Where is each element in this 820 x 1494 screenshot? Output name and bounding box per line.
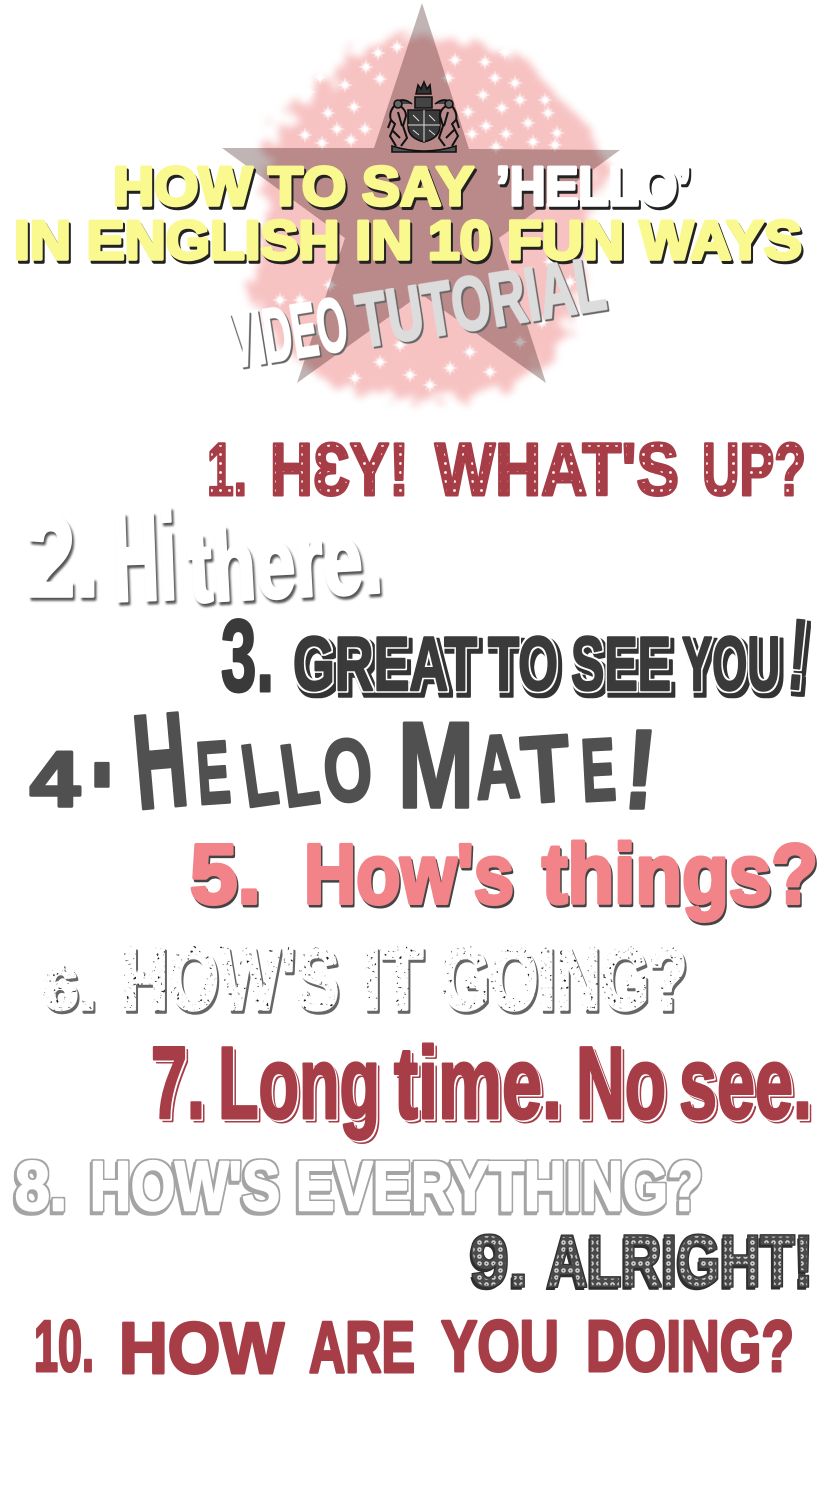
item 8: 8. bbox=[15, 1147, 67, 1225]
item 2: there. bbox=[185, 502, 385, 624]
item 8: EVERYTHING? bbox=[296, 1147, 703, 1225]
panel: header star emblem bbox=[222, 3, 620, 400]
item 6 bbox=[42, 929, 687, 1028]
item 4: H bbox=[128, 685, 193, 838]
icon: royal coat of arms bbox=[388, 82, 459, 152]
item 4: E bbox=[193, 722, 233, 823]
subtitle: video tutorial: VIDEO bbox=[221, 282, 353, 385]
item 4: T bbox=[518, 715, 573, 823]
item 7: No bbox=[576, 1026, 666, 1140]
item 10 bbox=[34, 1307, 794, 1389]
item 2: 2. bbox=[27, 495, 99, 620]
item 1 bbox=[207, 428, 806, 511]
item 3 bbox=[221, 598, 812, 713]
item 7: 7. bbox=[151, 1026, 205, 1140]
title line 1: ’HELLO’ bbox=[496, 155, 691, 217]
item 1: 1. bbox=[207, 428, 247, 511]
subtitle: video tutorial: TUTORIAL bbox=[351, 241, 611, 364]
item 5: How's bbox=[304, 827, 514, 921]
item 4: E bbox=[579, 719, 618, 820]
item 7: Long bbox=[218, 1026, 380, 1140]
item 5: 5. bbox=[190, 827, 261, 921]
item 10: YOU bbox=[441, 1307, 559, 1387]
item 3: GREAT bbox=[293, 622, 477, 707]
item 6: GOING? bbox=[441, 929, 687, 1028]
item 10: 10. bbox=[34, 1307, 94, 1387]
item 10: HOW bbox=[119, 1309, 284, 1389]
item 7 bbox=[151, 1026, 812, 1140]
item 6: HOW'S bbox=[121, 929, 339, 1028]
item 4: A bbox=[473, 717, 522, 819]
item 1: WHAT'S bbox=[435, 428, 679, 511]
item 9: 9. bbox=[470, 1222, 528, 1302]
item 3: 3. bbox=[221, 599, 274, 713]
item 4: L bbox=[275, 723, 324, 826]
pink sparkle burst bbox=[250, 34, 608, 400]
item 3: TO bbox=[488, 622, 558, 707]
item 4 bbox=[30, 650, 661, 838]
item 6: 6. bbox=[42, 955, 96, 1022]
item 4: . bbox=[89, 650, 115, 818]
item 3: SEE bbox=[571, 622, 671, 707]
item 6: IT bbox=[362, 929, 423, 1028]
item 1: HƐY! bbox=[270, 428, 409, 511]
item 2 bbox=[27, 487, 385, 628]
grey star bbox=[222, 3, 620, 383]
item 8 bbox=[15, 1147, 703, 1225]
item 7: time. bbox=[394, 1026, 562, 1140]
item 4: O bbox=[319, 718, 377, 822]
item 4: ! bbox=[620, 706, 661, 832]
item 10: ARE bbox=[309, 1308, 415, 1388]
title bbox=[14, 155, 802, 271]
title line 2: IN ENGLISH IN 10 FUN WAYS bbox=[14, 209, 802, 271]
item 4: M bbox=[398, 697, 474, 833]
item 5 bbox=[190, 827, 818, 921]
item 2: Hi bbox=[110, 487, 179, 628]
subtitle: video tutorial bbox=[221, 241, 611, 385]
item 8: HOW'S bbox=[90, 1147, 280, 1225]
title line 1 bbox=[113, 155, 691, 217]
item 4: 4 bbox=[30, 735, 80, 823]
title line 1: HOW TO SAY bbox=[113, 155, 474, 217]
item 4: L bbox=[236, 723, 283, 826]
